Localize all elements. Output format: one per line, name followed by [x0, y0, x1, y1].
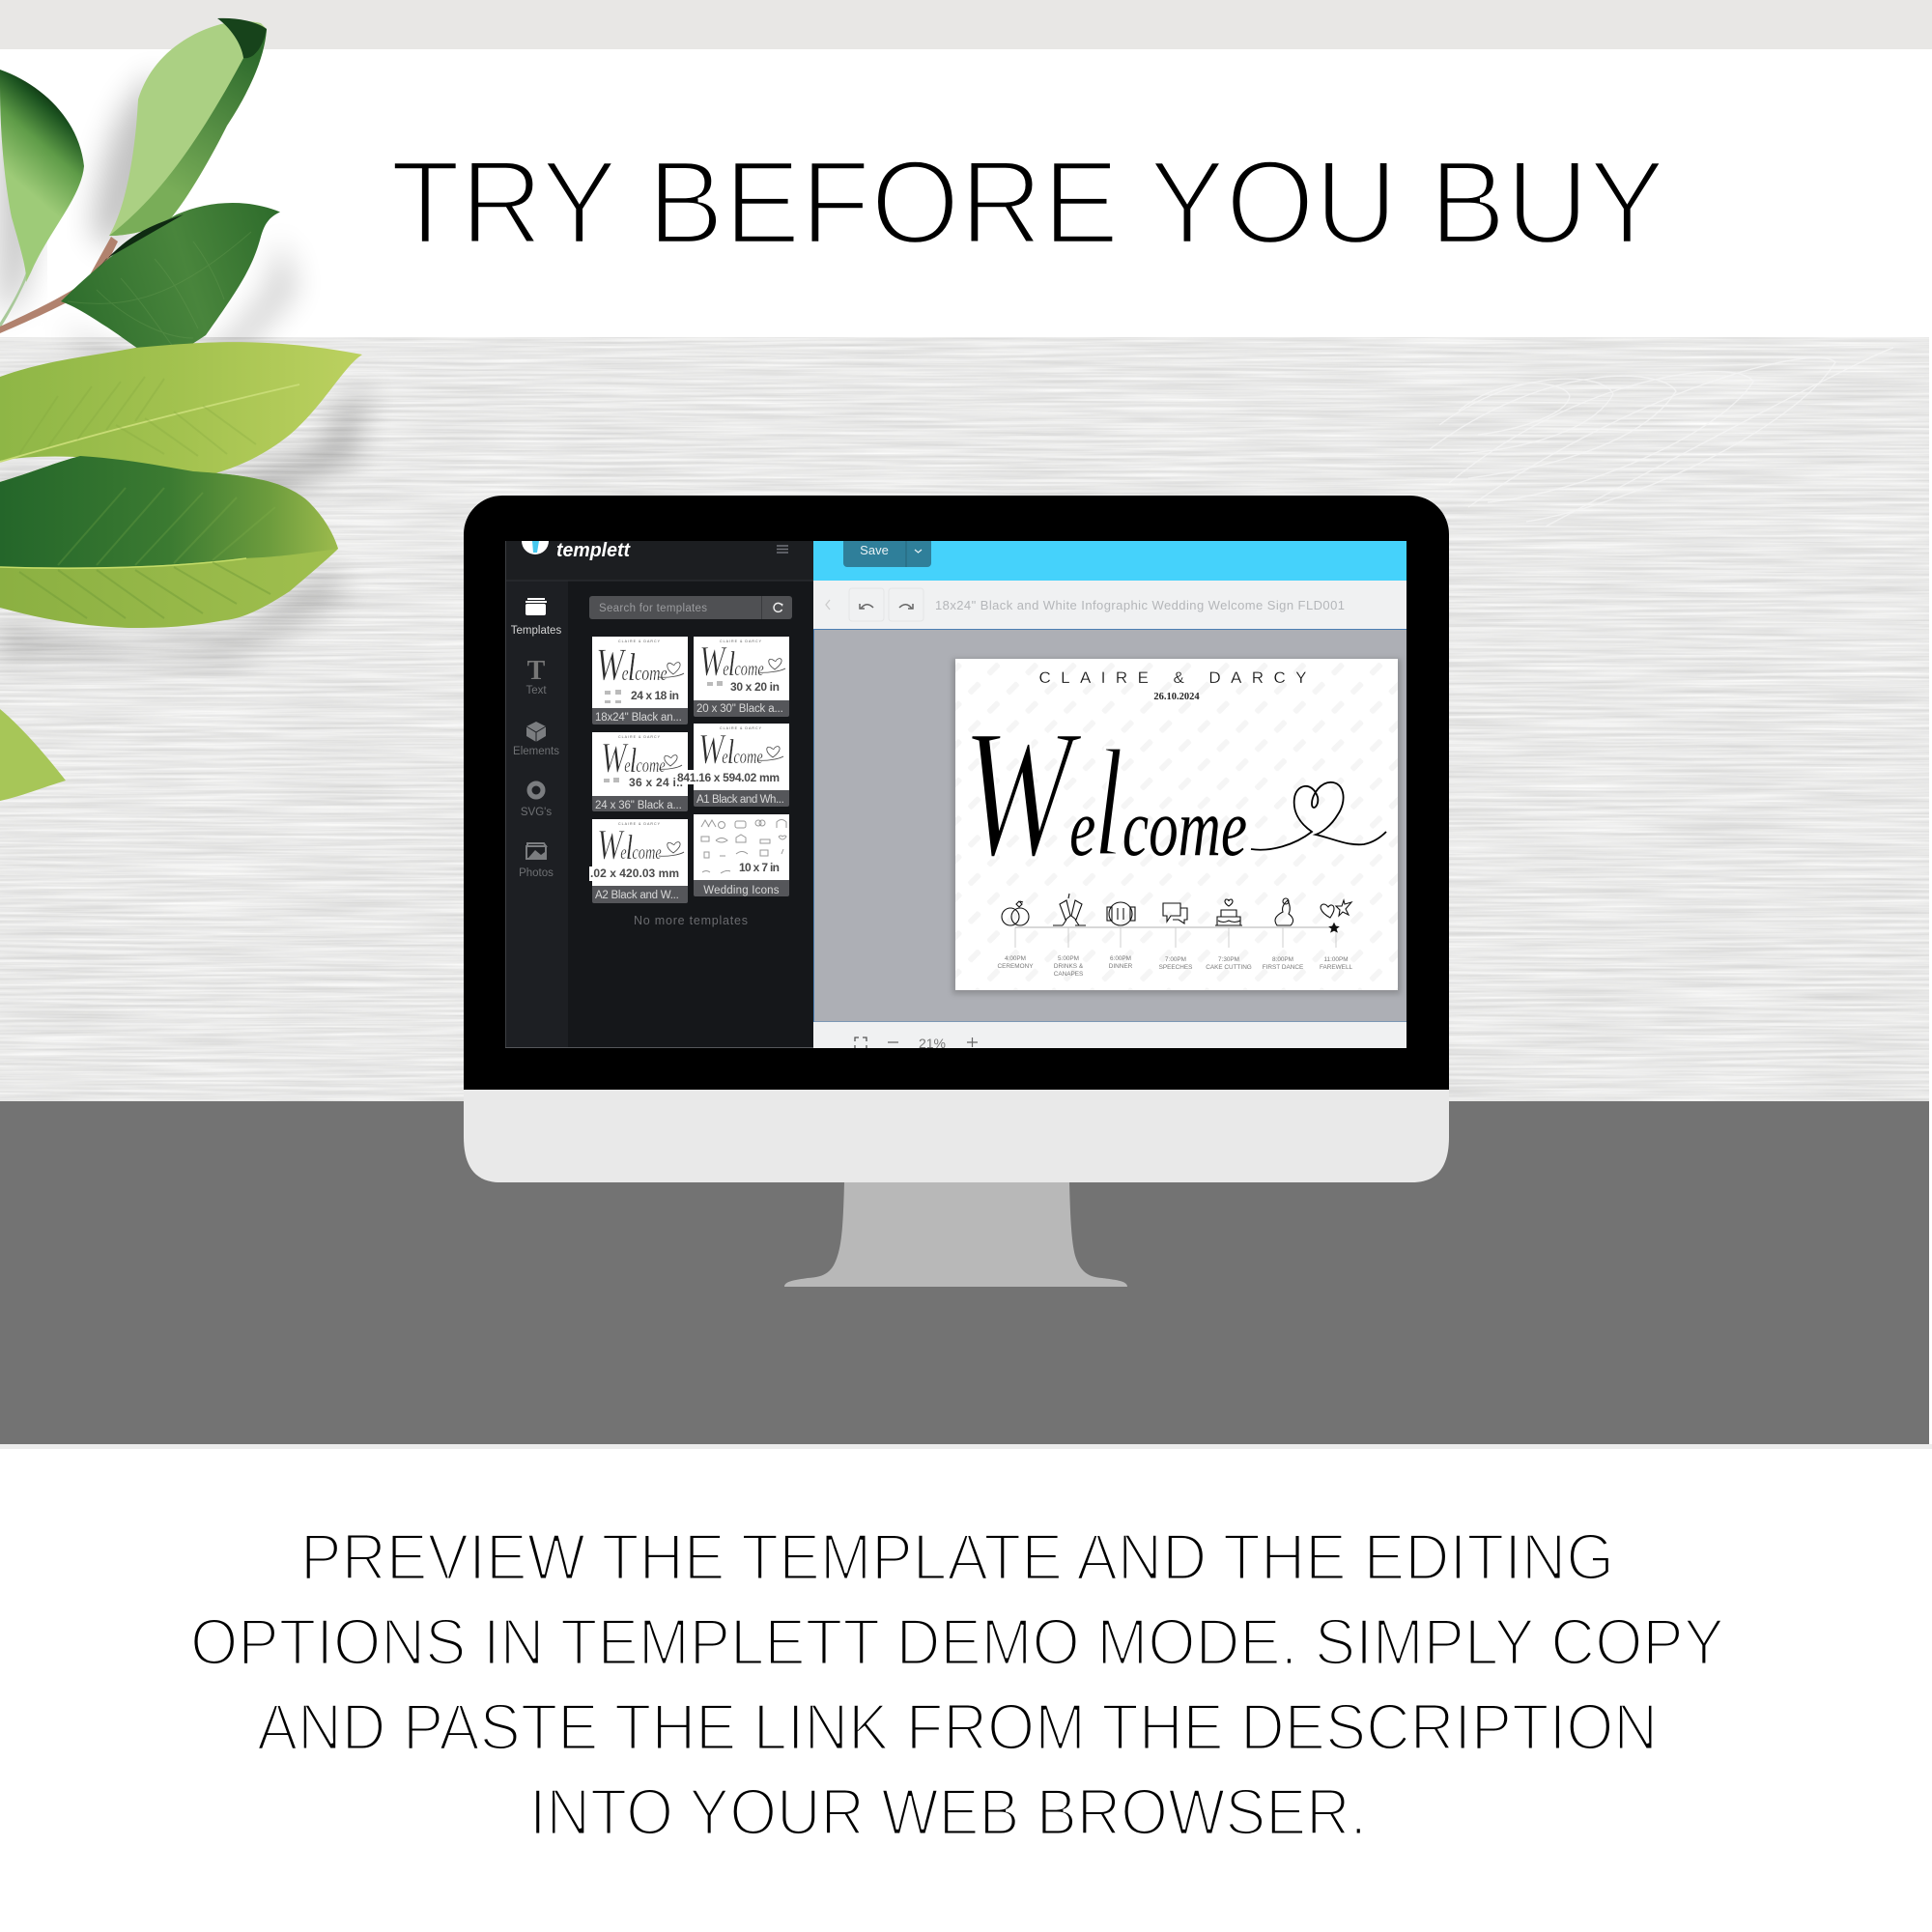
timeline labels: DINNER — [1109, 963, 1133, 970]
templett logo — [522, 540, 631, 561]
thumbnail 1: 18x24" Black an... — [595, 712, 682, 724]
editor sidebar — [505, 540, 813, 1048]
thumbnail 4 — [677, 724, 789, 807]
leaf: yellow-green — [0, 342, 362, 473]
timeline labels: FAREWELL — [1320, 964, 1352, 971]
timeline labels: 6:00PM — [1110, 955, 1131, 962]
timeline labels: DRINKS & — [1054, 963, 1084, 970]
thumbnail 2: Welcome — [699, 639, 764, 685]
thumbnail 3 — [592, 732, 688, 811]
title banner — [0, 49, 1929, 337]
nav: photos — [519, 843, 554, 879]
leaf: dark centre — [61, 203, 280, 358]
sign shadow — [952, 659, 1401, 994]
screen bottom mask — [813, 1048, 1406, 1054]
timeline labels: FIRST DANCE — [1263, 964, 1303, 971]
timeline labels: SPEECHES — [1159, 964, 1192, 971]
thumbnail 4: Welcome — [698, 726, 763, 773]
sign names: CLAIRE & DARCY — [1039, 668, 1306, 687]
description text: AND PASTE THE LINK FROM THE DESCRIPTION — [257, 1690, 1658, 1764]
thumbnail 3: 24 x 36" Black a... — [595, 800, 682, 811]
heading: TRY BEFORE YOU BUY — [390, 137, 1665, 270]
timeline labels: CEREMONY — [998, 963, 1034, 970]
thumbnail 4: A1 Black and Wh... — [696, 794, 784, 806]
top blue bar — [813, 541, 1406, 581]
description text: PREVIEW THE TEMPLATE AND THE EDITING — [300, 1520, 1614, 1594]
timeline labels: 11:00PM — [1323, 956, 1349, 963]
toolbar: 18x24" Black and White Infographic Wedding Welcome Sign FLD001 — [935, 598, 1345, 612]
thumbnail 5: A2 Black and W... — [595, 890, 679, 901]
search field: Search for templates — [599, 603, 707, 614]
leaf: large two-tone — [0, 456, 338, 628]
nav: photos: Photos — [519, 867, 554, 879]
thumbnail 2: 30 x 20 in — [730, 680, 780, 694]
thumbnail 1 — [592, 637, 688, 724]
icon: heart and stars — [1321, 900, 1351, 931]
leaf: lower tip — [0, 709, 66, 801]
timeline labels: 8:00PM — [1272, 956, 1293, 963]
thumbnail 5: .02 x 420.03 mm — [590, 867, 679, 880]
icon: glasses — [1053, 894, 1086, 925]
canvas area — [813, 629, 1406, 1022]
nav: templates: Templates — [511, 625, 561, 637]
top grey band — [0, 0, 1932, 49]
nav: text: Text — [526, 685, 547, 696]
nav: svgs — [521, 783, 552, 818]
nav: elements: Elements — [513, 746, 559, 757]
thumbnail 2: 20 x 30" Black a... — [696, 703, 783, 715]
sign script word: Welcome — [962, 691, 1247, 895]
thumbnail 3: 36 x 24 i.. — [629, 776, 683, 789]
description text — [190, 1520, 1724, 1849]
thumbnail 3: Welcome — [601, 735, 666, 781]
monitor chin — [464, 1090, 1449, 1182]
sign date: 26.10.2024 — [1153, 692, 1200, 702]
icon: speech — [1163, 903, 1187, 923]
leaf branch decoration — [0, 18, 367, 801]
timeline labels: 4:00PM — [1005, 955, 1026, 962]
welcome sign — [955, 659, 1398, 990]
menu icon — [777, 546, 788, 553]
nav: text — [526, 656, 547, 696]
wood background — [0, 337, 1929, 1101]
no more templates note: No more templates — [634, 914, 748, 927]
thumbnail 4: CLAIRE & DARCY — [720, 726, 762, 730]
thumbnail 6: Wedding Icons — [703, 885, 780, 896]
desk band — [0, 1101, 1929, 1444]
thumbnail 3: CLAIRE & DARCY — [618, 735, 661, 739]
thumbnail 2: CLAIRE & DARCY — [720, 639, 762, 643]
monitor bezel — [464, 496, 1449, 1090]
icon: cake — [1215, 899, 1242, 925]
timeline axis — [1015, 926, 1336, 928]
thumbnail 5: CLAIRE & DARCY — [618, 822, 661, 826]
nav: text: T — [527, 656, 546, 686]
thumbnail 2 — [694, 637, 789, 717]
thumbnail 6 — [694, 814, 789, 896]
description text: INTO YOUR WEB BROWSER. — [529, 1776, 1367, 1849]
thumbnail 1: Welcome — [596, 640, 668, 691]
timeline labels: 5:00PM — [1058, 955, 1079, 962]
toolbar — [813, 581, 1406, 629]
thumbnail 5 — [589, 819, 688, 903]
zoom bar — [813, 1022, 1406, 1051]
thumbnail 6: 10 x 7 in — [739, 861, 780, 874]
timeline labels — [998, 955, 1352, 978]
thumbnail 4: 841.16 x 594.02 mm — [677, 771, 780, 784]
description text: OPTIONS IN TEMPLETT DEMO MODE. SIMPLY COPY — [190, 1605, 1724, 1679]
icon: dancers — [1275, 898, 1293, 925]
timeline labels: 7:00PM — [1165, 956, 1186, 963]
desk edge strip — [0, 1444, 1932, 1449]
timeline labels: CAKE CUTTING — [1206, 964, 1252, 971]
nav: elements — [513, 722, 559, 757]
stem — [0, 237, 118, 333]
thumbnail 5: Welcome — [597, 822, 662, 868]
leaf shadows — [0, 72, 367, 657]
nav: svgs: SVG's — [521, 807, 552, 818]
screen — [505, 540, 1406, 1054]
thumbnail 1: CLAIRE & DARCY — [618, 639, 661, 643]
timeline labels: CANAPES — [1054, 971, 1083, 978]
heart flourish — [1251, 782, 1386, 850]
zoom bar: 21% — [919, 1036, 946, 1051]
nav: templates — [511, 598, 561, 637]
monitor stand — [784, 1182, 1127, 1287]
search field — [589, 596, 792, 619]
timeline labels: 7:30PM — [1218, 956, 1239, 963]
leaf: upper left — [0, 70, 84, 328]
templett logo: templett — [556, 540, 631, 561]
icon: rings — [1002, 901, 1029, 925]
save button — [843, 541, 931, 567]
save button: Save — [860, 543, 889, 557]
leaf: top — [109, 18, 267, 236]
icon: plate — [1107, 902, 1135, 925]
thumbnail 1: 24 x 18 in — [631, 689, 679, 702]
monitor — [464, 496, 1449, 1287]
